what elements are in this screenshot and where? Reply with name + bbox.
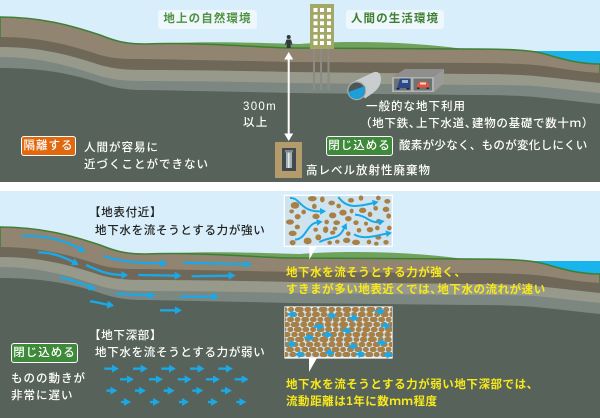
text: slow flow explanation — [286, 378, 539, 408]
text: general underground use — [360, 100, 594, 130]
label: natural environment — [158, 10, 257, 29]
badge: isolate — [21, 136, 76, 156]
text: slow flow explanation: 流動距離は1年に数ｍｍ程度 — [286, 396, 438, 408]
text: confinement note: 酸素が少なく、ものが変化しにくい — [399, 140, 588, 152]
heading: near surface — [89, 206, 265, 237]
text: fast flow explanation — [286, 266, 546, 296]
badge: confine — [326, 136, 393, 156]
icon: building with piles — [310, 4, 334, 90]
text: high-level waste: 高レベル放射性廃棄物 — [306, 165, 431, 177]
heading: deep underground — [89, 329, 265, 359]
hill — [140, 252, 470, 270]
heading: near surface: 地下水を流そうとする力が強い — [95, 225, 265, 237]
arrow: 300m depth — [284, 52, 293, 141]
text: slow movement note: ものの動きが — [11, 373, 86, 385]
depth label: 300m — [243, 101, 277, 113]
sea — [530, 261, 600, 291]
hill — [140, 42, 470, 60]
icon: underground box tunnel with cars — [392, 69, 444, 92]
panel: surface and underground use — [0, 0, 600, 182]
inset: dense gravel with slow flow — [281, 307, 394, 372]
groundwater arrows: curved near-surface flow — [22, 236, 246, 310]
depth label — [243, 101, 277, 129]
badge: confine: 閉じ込める — [328, 140, 391, 152]
label: natural environment: 地上の自然環境 — [163, 13, 252, 25]
text: slow flow explanation: 地下水を流そうとする力が弱い地下深部では、 — [286, 379, 539, 391]
cross section of ground with facilities — [0, 4, 600, 182]
text: isolation note: 近づくことができない — [84, 159, 209, 171]
ground layers — [0, 17, 600, 182]
text: slow movement note — [11, 372, 86, 402]
sea — [530, 51, 600, 81]
text: general underground use: （地下鉄、上下水道、建物の基礎で数十ｍ） — [360, 118, 594, 130]
heading: deep underground: 地下水を流そうとする力が弱い — [95, 347, 265, 359]
badge: isolate: 隔離する — [24, 140, 74, 152]
text: isolation note: 人間が容易に — [84, 142, 159, 154]
text: fast flow explanation: すきまが多い地表近くでは、地下水の流れが速い — [286, 284, 546, 296]
text: slow movement note: 非常に遅い — [11, 390, 74, 402]
groundwater arrows: slow deep flow — [104, 369, 242, 402]
heading: deep underground: 【地下深部】 — [89, 330, 162, 342]
panel: groundwater flow — [0, 191, 600, 418]
icon: person — [285, 35, 292, 48]
icon: water pipe tunnel — [347, 72, 381, 100]
label: human environment — [346, 10, 444, 29]
depth label: 以上 — [243, 117, 269, 129]
text: isolation note — [84, 141, 209, 171]
badge: confine — [11, 343, 78, 363]
cross section with groundwater arrows and magnified insets — [0, 194, 600, 418]
label: human environment: 人間の生活環境 — [351, 13, 439, 25]
icon: disposal pit with canister — [275, 142, 302, 178]
heading: near surface: 【地表付近】 — [89, 207, 162, 219]
ground layers — [0, 227, 600, 418]
badge: confine: 閉じ込める — [13, 347, 76, 359]
text: general underground use: 一般的な地下利用 — [366, 101, 466, 113]
inset: coarse gravel with fast flow — [284, 195, 392, 260]
text: fast flow explanation: 地下水を流そうとする力が強く、 — [286, 267, 466, 279]
